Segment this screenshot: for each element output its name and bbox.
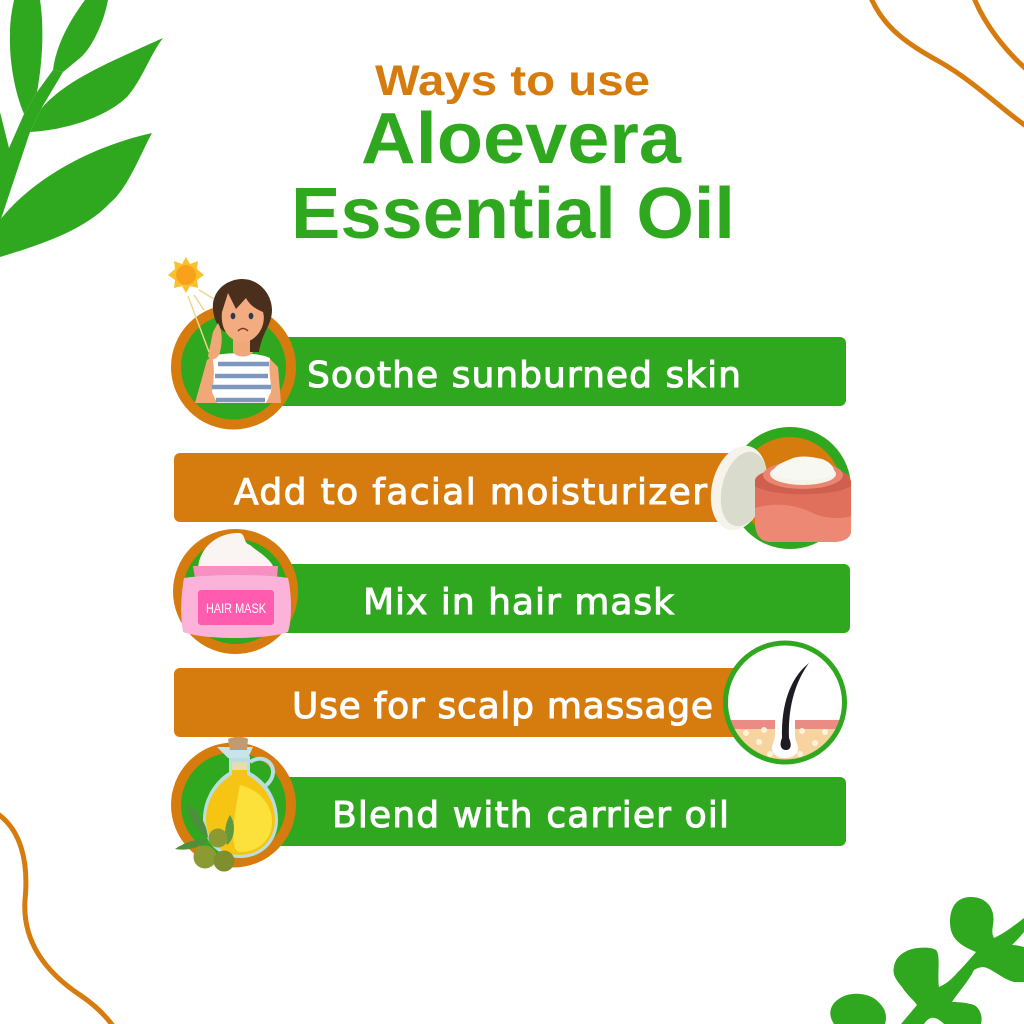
row 3: Mix in hair mask bbox=[178, 533, 850, 649]
banner text: Use for scalp massage bbox=[292, 686, 713, 727]
banner text: Add to facial moisturizer bbox=[234, 472, 707, 513]
row 4: Use for scalp massage bbox=[174, 643, 850, 770]
banner text: Soothe sunburned skin bbox=[307, 355, 741, 396]
row 1: Soothe sunburned skin bbox=[168, 257, 846, 424]
icon: hair mask jar: HAIR MASK bbox=[206, 600, 267, 616]
icon: hair mask jar bbox=[178, 533, 293, 649]
icon: cream jar bbox=[702, 427, 851, 549]
banner bbox=[174, 668, 744, 737]
row 2: Add to facial moisturizer bbox=[174, 427, 851, 549]
title line: Aloevera: Aloevera bbox=[361, 99, 682, 179]
decoration: orange curve bottom left bbox=[0, 814, 113, 1024]
banner bbox=[260, 777, 846, 846]
title line: Essential Oil: Essential Oil bbox=[291, 174, 735, 254]
row 5: Blend with carrier oil bbox=[175, 737, 846, 872]
banner bbox=[260, 337, 846, 406]
banner text: Blend with carrier oil bbox=[332, 795, 729, 836]
icon: hair follicle bbox=[720, 643, 850, 770]
banner text: Mix in hair mask bbox=[363, 582, 674, 623]
decoration: orange curves top right bbox=[871, 0, 1024, 126]
icon: oil bottle with olives bbox=[175, 737, 291, 872]
title line: Ways to use: Ways to use bbox=[375, 57, 650, 105]
banner bbox=[270, 564, 850, 633]
title bbox=[291, 57, 735, 254]
banner bbox=[174, 453, 754, 522]
decoration: green sprig bottom right bbox=[830, 897, 1024, 1024]
decoration: green leaf branch top left bbox=[0, 0, 163, 257]
icon: woman with sunburn bbox=[168, 257, 291, 424]
